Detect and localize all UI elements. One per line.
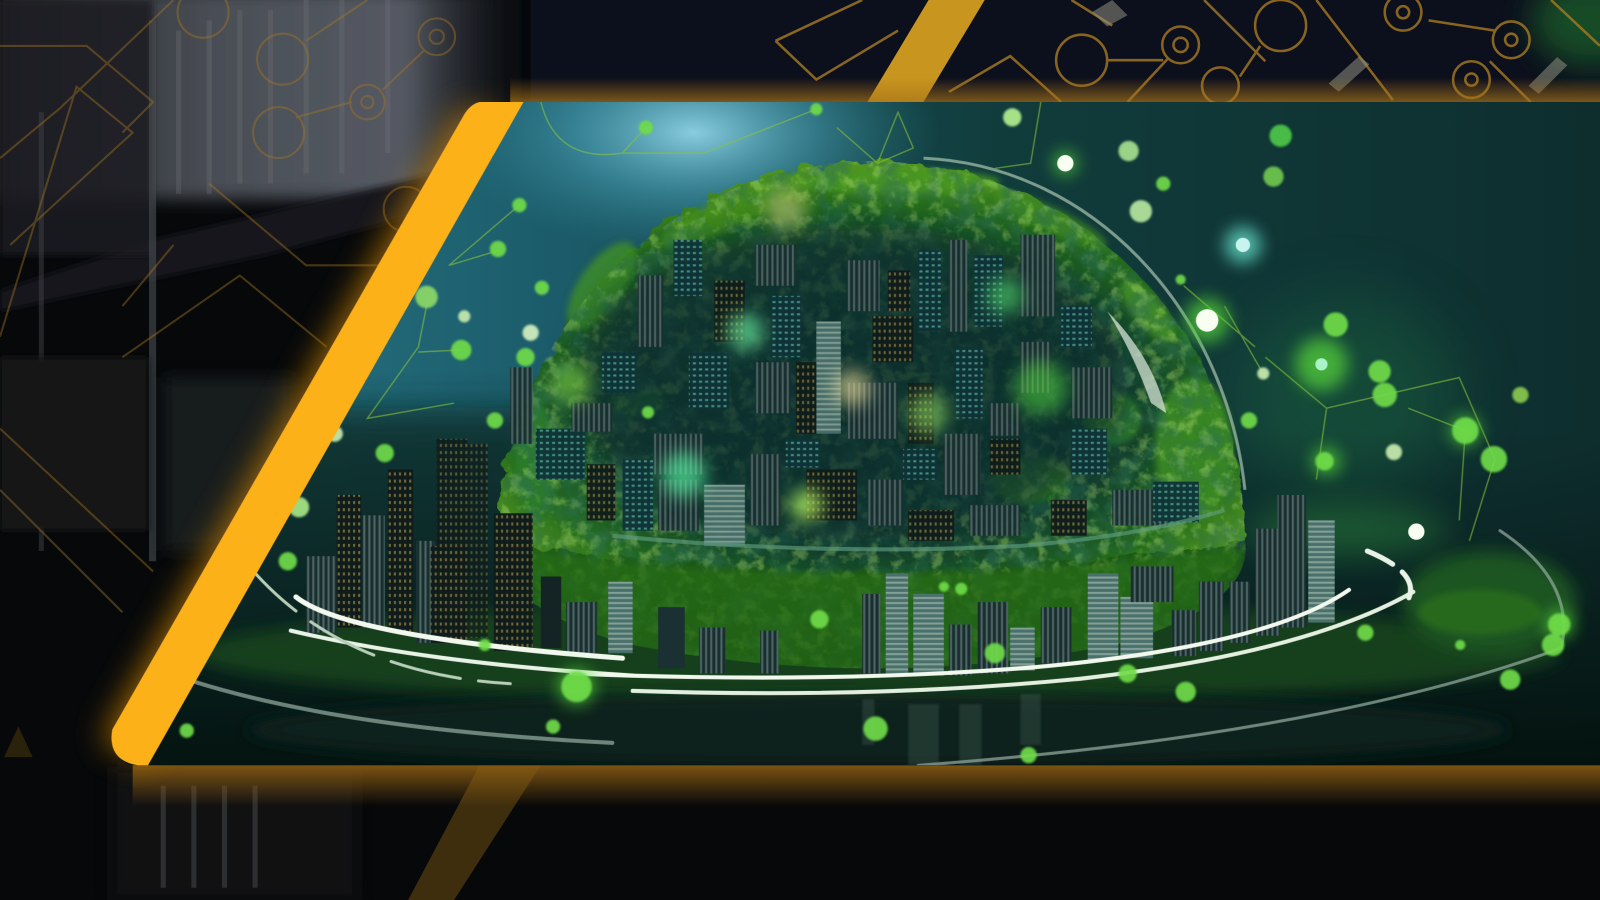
dome: body with rough foliage edge <box>500 161 1245 663</box>
band: yellow diagonal <box>112 102 523 765</box>
stripe: bottom faded diagonal <box>408 765 541 900</box>
particles: white lights <box>1057 155 1424 540</box>
circuit pale bars <box>1092 0 1567 94</box>
city skyline left <box>306 439 597 653</box>
dome: inner green lights <box>551 189 1067 521</box>
sky glow <box>494 102 915 236</box>
ground: moss platform <box>194 505 1577 765</box>
background: server racks on the left <box>0 0 541 900</box>
panel: city dome image <box>118 102 1600 766</box>
dome: green lower band <box>500 546 1245 673</box>
circuit lines left <box>0 0 455 612</box>
circuit lines top <box>776 0 1600 104</box>
rings: white light trails <box>194 531 1564 765</box>
dome: foliage rim <box>515 160 1233 520</box>
glow: top edge <box>510 78 1600 102</box>
dome: moss texture <box>490 153 1255 673</box>
particles: green soft halos <box>558 151 1573 705</box>
stripe: top yellow diagonal <box>867 0 985 102</box>
warning triangle <box>4 727 33 757</box>
network lines <box>367 102 1495 541</box>
particles: green dots <box>180 103 1570 763</box>
background: dark top strip <box>531 0 1600 102</box>
city skyline front <box>608 495 1335 676</box>
dome: city blocks <box>510 235 1199 546</box>
green haze at right <box>1235 296 1459 500</box>
bottom shade <box>118 489 1600 766</box>
dome: dark interior <box>577 224 1128 541</box>
glow: behind yellow band <box>102 112 500 760</box>
glow: bottom edge <box>133 765 1600 806</box>
dome: glass highlight <box>923 158 1245 490</box>
left mid tone <box>162 390 539 742</box>
panel background <box>102 102 1600 765</box>
reflections <box>862 694 1041 765</box>
dome: terrace <box>612 510 1224 549</box>
background: green corner tint <box>1531 0 1600 66</box>
